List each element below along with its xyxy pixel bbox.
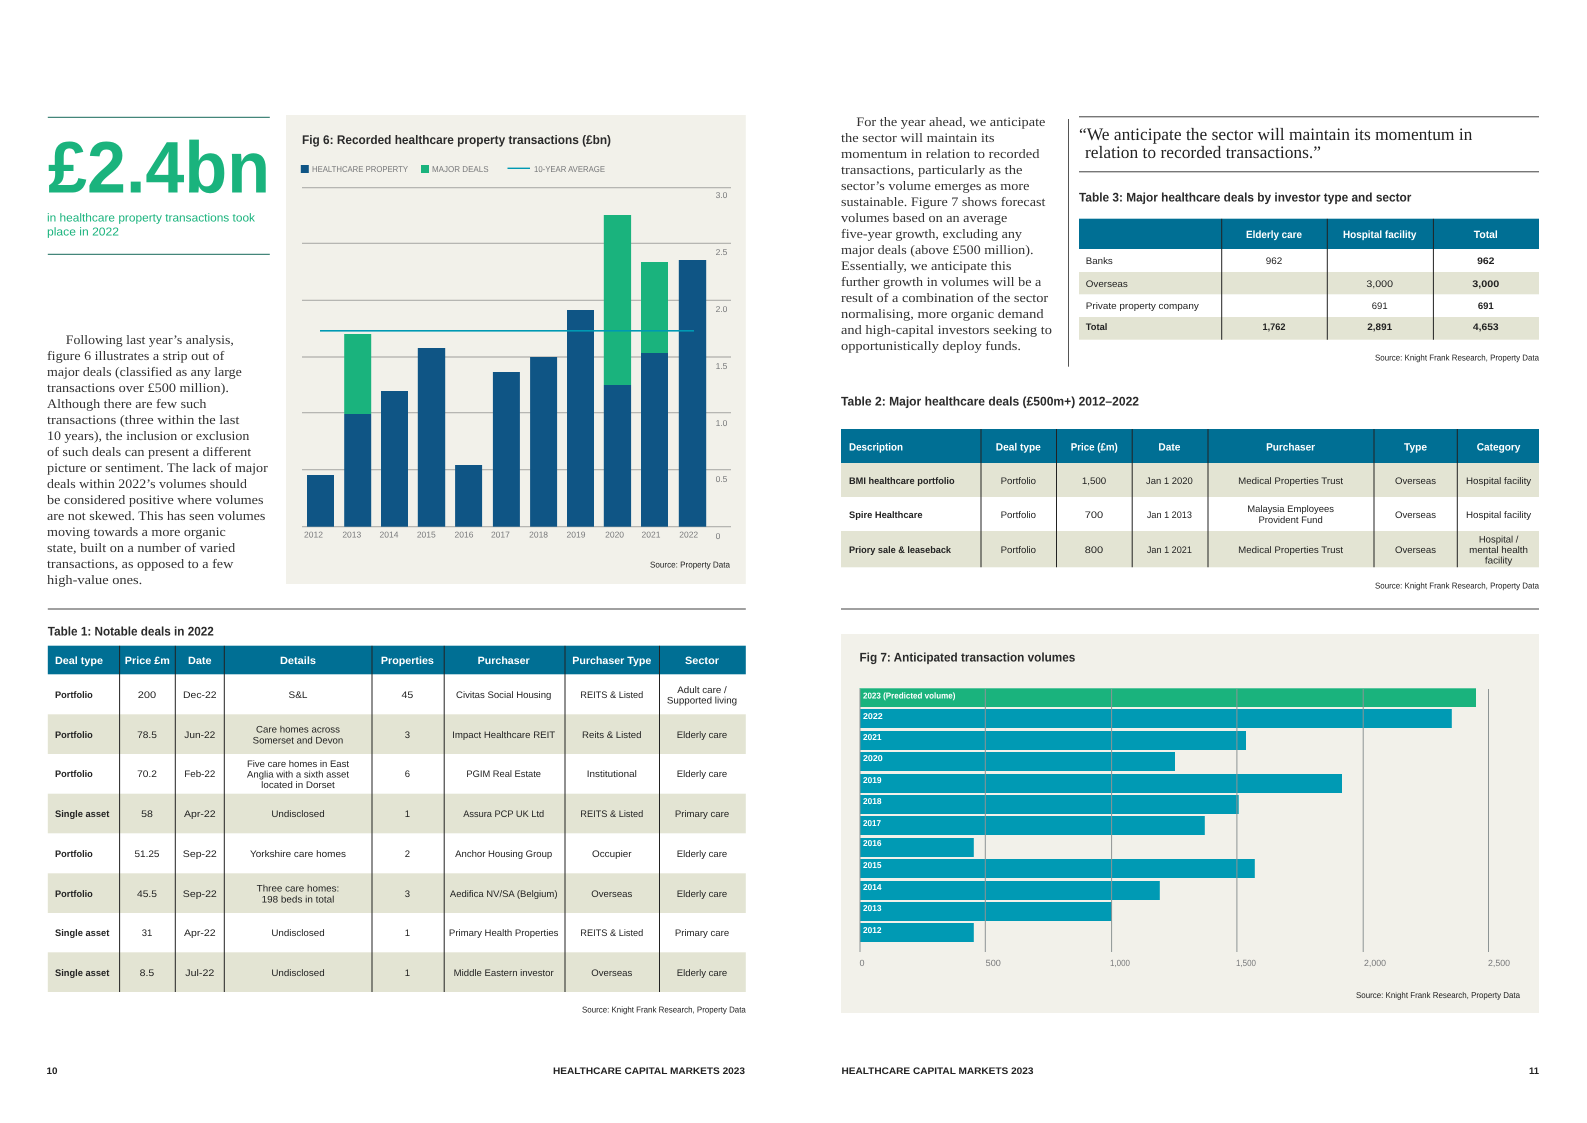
source note: Table 2: Source: Knight Frank Research, Property Data — [1375, 580, 1539, 590]
row: Overseas: Overseas — [1086, 279, 1128, 290]
row: Single asset 8.5: Single asset — [55, 968, 110, 979]
bar labels: 2022 — [863, 711, 883, 721]
callout: £2.4bn headline stat — [47, 117, 270, 255]
text block: right page body copy: opportunistically deploy funds. — [841, 338, 1021, 353]
bar labels: 2021 — [863, 732, 882, 742]
text block: right page body copy: and high-capital investors seeking to — [841, 322, 1052, 337]
source note: Source: Property Data — [650, 560, 730, 570]
row: Total — [1086, 322, 1499, 333]
x axis labels: 2019 — [567, 530, 586, 540]
row: Portfolio 51.25: Yorkshire care homes — [250, 849, 346, 860]
text block: right page body copy: momentum in relation to recorded — [841, 146, 1040, 161]
row: Portfolio 51.25 — [55, 849, 727, 860]
row: Single asset 31: Primary Health Properties — [449, 928, 559, 939]
table: major healthcare deals — [841, 429, 1539, 567]
table title: Table 3: Table 3: Major healthcare deals by investor type and sector — [1079, 191, 1412, 205]
row: Portfolio 78.5: Portfolio — [55, 730, 93, 741]
row: Portfolio 200: 200 — [138, 690, 156, 701]
table header row: Hospital facility — [1343, 229, 1417, 241]
x axis labels: 2021 — [642, 530, 661, 540]
text block: right page body copy: transactions, particularly as the — [841, 162, 1023, 177]
table header row — [55, 655, 719, 667]
row: BMI healthcare portfolio: Portfolio — [1001, 476, 1036, 487]
row: Priory sale & leaseback: Hospital / — [1479, 534, 1519, 545]
row: Portfolio 70.2: Feb-22 — [184, 769, 215, 780]
row: Banks: 962 — [1266, 256, 1282, 267]
row: Single asset 8.5: Jul-22 — [185, 968, 214, 979]
row: Portfolio 200: Dec-22 — [183, 690, 217, 701]
table header row — [1246, 229, 1498, 241]
pull quote: relation to recorded transactions.” — [1085, 142, 1321, 162]
x axis labels: 2022 — [679, 530, 698, 540]
y axis labels: 0.5 — [716, 474, 728, 484]
bar labels: 2015 — [863, 860, 882, 870]
row: Single asset 58: Undisclosed — [271, 809, 325, 820]
row: Spire Healthcare: Spire Healthcare — [849, 510, 922, 521]
x axis labels: 2,000 — [1364, 958, 1386, 968]
table header row: Category — [1477, 441, 1521, 453]
row: Portfolio 45.5: Portfolio — [55, 889, 93, 900]
x axis labels — [860, 958, 1510, 968]
row: Single asset 8.5: Middle Eastern investor — [454, 968, 554, 979]
row: Portfolio 78.5: Care homes across — [256, 724, 340, 735]
row: BMI healthcare portfolio: Medical Properties Trust — [1238, 476, 1343, 487]
y axis labels: 0 — [716, 531, 721, 541]
x axis labels: 2013 — [342, 530, 362, 540]
row: Portfolio 70.2: PGIM Real Estate — [466, 769, 541, 780]
text block: left page body copy: transactions over £500 million). — [47, 380, 229, 395]
row: Single asset 8.5: Elderly care — [677, 968, 727, 979]
row: Total: 4,653 — [1473, 322, 1499, 333]
row: BMI healthcare portfolio: BMI healthcare portfolio — [849, 476, 955, 487]
row: Priory sale & leaseback: Priory sale & leaseback — [849, 545, 952, 556]
table header row: Deal type — [55, 655, 103, 667]
stat caption: in healthcare property transactions took — [47, 213, 255, 225]
text block: left page body copy: transactions (three within the last — [47, 412, 240, 427]
legend: MAJOR DEALS — [432, 164, 489, 174]
row: Priory sale & leaseback — [849, 534, 1528, 566]
bar labels: 2014 — [863, 882, 882, 892]
bar labels: 2020 — [863, 753, 883, 763]
row: Portfolio 78.5: Somerset and Devon — [253, 735, 343, 746]
row: Portfolio 78.5: 3 — [405, 730, 410, 741]
footer: page 11 number: 11 — [1529, 1066, 1540, 1077]
chart title: Fig 6: Recorded healthcare property transactions (£bn) — [302, 133, 611, 147]
text block: right page body copy: Essentially, we anticipate this — [841, 258, 1012, 273]
table header row: Purchaser Type — [572, 655, 651, 667]
x axis labels: 2012 — [304, 530, 323, 540]
bar labels — [863, 690, 956, 935]
row: Portfolio 78.5: Reits & Listed — [582, 730, 642, 741]
row: Single asset 31: 31 — [142, 928, 152, 939]
row: Single asset 8.5: 8.5 — [140, 968, 154, 979]
row: Single asset 31: Single asset — [55, 928, 110, 939]
text block: left page body copy: deals within 2022’s volumes should — [47, 476, 248, 491]
10-year average line — [320, 330, 694, 332]
row: Banks: 962 — [1477, 256, 1495, 267]
row: Portfolio 78.5: 78.5 — [137, 730, 157, 741]
row: Spire Healthcare: Portfolio — [1001, 510, 1036, 521]
legend — [301, 164, 605, 174]
row: Portfolio 51.25: Portfolio — [55, 849, 93, 860]
row: Portfolio 200: 45 — [402, 690, 413, 701]
row: BMI healthcare portfolio: Jan 1 2020 — [1146, 476, 1193, 487]
table title: Table 1: Table 1: Notable deals in 2022 — [48, 624, 214, 638]
row: Single asset 31: Apr-22 — [184, 928, 216, 939]
table header row: Properties — [381, 655, 434, 667]
row: Single asset 31 — [55, 928, 729, 939]
footer: page 11 publication name: HEALTHCARE CAPITAL MARKETS 2023 — [842, 1066, 1034, 1077]
table: deals by investor type and sector — [1079, 219, 1539, 340]
row: Spire Healthcare: Malaysia Employees — [1247, 504, 1334, 515]
row: Portfolio 70.2: Portfolio — [55, 769, 93, 780]
bar labels: 2012 — [863, 925, 882, 935]
y axis labels: 2.0 — [716, 304, 728, 314]
bar labels: 2016 — [863, 838, 882, 848]
row: Priory sale & leaseback: Overseas — [1395, 545, 1436, 556]
row: Private property company: Private property company — [1086, 301, 1199, 312]
x axis labels: 2018 — [529, 530, 548, 540]
y axis labels: 2.5 — [716, 247, 728, 257]
table header row: Purchaser — [478, 655, 530, 667]
table header row: Sector — [685, 655, 719, 667]
table header row: Elderly care — [1246, 229, 1302, 241]
row: Single asset 31: Undisclosed — [271, 928, 325, 939]
row: Portfolio 51.25: Sep-22 — [183, 849, 217, 860]
row: Single asset 8.5: 1 — [405, 968, 410, 979]
row: Single asset 58: Single asset — [55, 809, 110, 820]
row: Portfolio 200: Supported living — [667, 695, 737, 706]
row: Portfolio 78.5: Jun-22 — [184, 730, 215, 741]
text block: right page body copy: result of a combination of the sector — [841, 290, 1049, 305]
row: Portfolio 78.5: Elderly care — [677, 730, 727, 741]
row: Single asset 58: 58 — [141, 809, 153, 820]
legend: 10-YEAR AVERAGE — [534, 164, 605, 174]
x axis labels: 500 — [986, 958, 1001, 968]
bar labels: 2023 (Predicted volume) — [863, 690, 956, 700]
row: Single asset 31: REITS & Listed — [580, 928, 643, 939]
table header row: Price (£m) — [1071, 441, 1118, 453]
x axis labels: 2014 — [380, 530, 399, 540]
bar labels: 2018 — [863, 796, 882, 806]
text block: left page body copy — [47, 332, 269, 587]
text block: left page body copy: state, built on a number of varied — [47, 540, 236, 555]
text block: left page body copy: major deals (classified as any large — [47, 364, 242, 379]
row: BMI healthcare portfolio: 1,500 — [1082, 476, 1106, 487]
source note: Source: Knight Frank Research, Property Data — [1356, 990, 1520, 1000]
row: Banks — [1086, 256, 1495, 267]
row: Portfolio 70.2: Institutional — [587, 769, 637, 780]
text block: right page body copy: volumes based on an average — [841, 210, 1008, 225]
row: Portfolio 45.5: 3 — [405, 889, 410, 900]
row: Portfolio 200 — [55, 685, 737, 706]
x axis labels: 2020 — [605, 530, 624, 540]
text block: left page body copy: high-value ones. — [47, 572, 142, 587]
row: Portfolio 70.2: Five care homes in East — [247, 759, 349, 770]
stat caption — [47, 213, 255, 239]
row: Portfolio 45.5: 45.5 — [137, 889, 157, 900]
source note: Table 1: Source: Knight Frank Research, Property Data — [582, 1004, 746, 1014]
chart title: Fig 7: Anticipated transaction volumes — [860, 651, 1075, 665]
text block: right page body copy: normalising, more organic demand — [841, 306, 1044, 321]
row: Portfolio 78.5: Impact Healthcare REIT — [452, 730, 555, 741]
table header row — [849, 441, 1521, 453]
text block: right page body copy: sustainable. Figure 7 shows forecast — [841, 194, 1046, 209]
text block: left page body copy: figure 6 illustrates a strip out of — [47, 348, 225, 363]
row: Priory sale & leaseback: Jan 1 2021 — [1147, 545, 1192, 556]
row: Portfolio 51.25: 51.25 — [134, 849, 160, 860]
row: Portfolio 51.25: Elderly care — [677, 849, 727, 860]
row: Portfolio 70.2 — [55, 759, 727, 791]
bar labels: 2013 — [863, 903, 882, 913]
table header row: Description — [849, 441, 903, 453]
panel: Fig 6 chart — [286, 115, 746, 584]
table: notable deals in 2022 — [48, 646, 746, 992]
row: Single asset 58: 1 — [405, 809, 410, 820]
bar labels: 2017 — [863, 818, 881, 828]
row: Spire Healthcare — [849, 504, 1531, 526]
stacked bar chart — [307, 215, 706, 527]
text block: right page body copy: five-year growth, excluding any — [841, 226, 1023, 241]
row: Portfolio 70.2: 6 — [405, 769, 410, 780]
row: Portfolio 45.5: Elderly care — [677, 889, 727, 900]
table header row: Date — [1158, 441, 1181, 453]
row: Private property company: 691 — [1478, 301, 1494, 312]
text block: right page body copy: further growth in volumes will be a — [841, 274, 1042, 289]
x axis labels — [304, 530, 698, 540]
text block: left page body copy: picture or sentiment. The lack of major — [47, 460, 269, 475]
row: Overseas: 3,000 — [1472, 279, 1499, 290]
row: Portfolio 70.2: 70.2 — [137, 769, 157, 780]
footer: page 10 publication name: HEALTHCARE CAPITAL MARKETS 2023 — [553, 1066, 745, 1077]
pull quote — [1079, 116, 1539, 172]
table header row: Date — [188, 655, 212, 667]
row: Single asset 58: REITS & Listed — [580, 809, 643, 820]
row: Single asset 31: Primary care — [675, 928, 729, 939]
stat figure: £2.4bn — [48, 128, 270, 208]
row: Portfolio 51.25: Occupier — [592, 849, 632, 860]
row: Single asset 58: Primary care — [675, 809, 729, 820]
table header row: Purchaser — [1266, 441, 1315, 453]
row: Portfolio 70.2: Anglia with a sixth asset — [247, 769, 349, 780]
row: BMI healthcare portfolio — [849, 476, 1531, 487]
pull quote: “We anticipate the sector will maintain its momentum in — [1079, 124, 1473, 144]
row: Priory sale & leaseback: mental health — [1469, 545, 1528, 556]
row: Portfolio 200: Civitas Social Housing — [456, 690, 551, 701]
row: Banks: Banks — [1086, 256, 1113, 267]
row: Single asset 58 — [55, 809, 729, 820]
row: Total: 1,762 — [1262, 322, 1286, 333]
text block: left page body copy: moving towards a more organic — [47, 524, 226, 539]
horizontal bar chart — [860, 688, 1488, 952]
row: Single asset 58: Apr-22 — [184, 809, 216, 820]
row: Single asset 31: 1 — [405, 928, 410, 939]
row: Total: 2,891 — [1367, 322, 1393, 333]
row: Priory sale & leaseback: Medical Properties Trust — [1238, 545, 1343, 556]
row: Portfolio 45.5: Aedifica NV/SA (Belgium) — [450, 889, 558, 900]
row: Portfolio 200: S&L — [289, 690, 307, 701]
row: Portfolio 45.5: Three care homes: — [257, 883, 339, 894]
row: BMI healthcare portfolio: Hospital facility — [1466, 476, 1531, 487]
row: Spire Healthcare: Overseas — [1395, 510, 1436, 521]
text block: left page body copy: are not skewed. This has seen volumes — [47, 508, 265, 523]
x axis labels: 2017 — [491, 530, 510, 540]
row: Priory sale & leaseback: 800 — [1085, 545, 1103, 556]
row: Portfolio 70.2: Elderly care — [677, 769, 727, 780]
text block: right page body copy — [841, 114, 1052, 353]
table title: Table 2: Table 2: Major healthcare deals (£500m+) 2012–2022 — [841, 395, 1139, 409]
text block: left page body copy: of such deals can present a different — [47, 444, 252, 459]
text block: left page body copy: be considered positive where volumes — [47, 492, 264, 507]
x axis labels: 0 — [860, 958, 865, 968]
text block: right page body copy: sector’s volume emerges as more — [841, 178, 1030, 193]
row: Spire Healthcare: Hospital facility — [1466, 510, 1531, 521]
row: Single asset 8.5: Undisclosed — [271, 968, 325, 979]
table header row: Total — [1474, 229, 1498, 241]
row: Single asset 58: Assura PCP UK Ltd — [463, 809, 544, 820]
row: Portfolio 70.2: located in Dorset — [261, 780, 335, 791]
row: Total: Total — [1086, 322, 1107, 333]
legend: HEALTHCARE PROPERTY — [312, 164, 408, 174]
row: Portfolio 45.5 — [55, 883, 727, 905]
row: Priory sale & leaseback: facility — [1485, 555, 1513, 566]
row: Portfolio 45.5: 198 beds in total — [262, 894, 334, 905]
x axis labels: 2015 — [417, 530, 436, 540]
row: Priory sale & leaseback: Portfolio — [1001, 545, 1036, 556]
row: Portfolio 200: Portfolio — [55, 690, 93, 701]
text block: left page body copy: 10 years), the inclusion or exclusion — [47, 428, 250, 443]
row: Portfolio 45.5: Sep-22 — [183, 889, 217, 900]
text block: left page body copy: transactions, as opposed to a few — [47, 556, 234, 571]
stat caption: place in 2022 — [47, 227, 119, 239]
text block: left page body copy: Although there are few such — [47, 396, 207, 411]
row: Portfolio 51.25: Anchor Housing Group — [455, 849, 552, 860]
y axis labels — [716, 190, 728, 541]
table header row: Type — [1404, 441, 1427, 453]
text block: left page body copy: Following last year’s analysis, — [66, 332, 234, 347]
row: Spire Healthcare: Provident Fund — [1258, 515, 1323, 526]
table header row: Details — [280, 655, 316, 667]
row: Portfolio 78.5 — [55, 724, 727, 746]
row: Portfolio 200: REITS & Listed — [580, 690, 643, 701]
x axis labels: 2016 — [455, 530, 474, 540]
row: Portfolio 45.5: Overseas — [591, 889, 633, 900]
row: Single asset 8.5: Overseas — [591, 968, 633, 979]
panel: Fig 7 chart — [841, 634, 1539, 1013]
x axis labels: 2,500 — [1488, 958, 1510, 968]
row: Portfolio 51.25: 2 — [405, 849, 410, 860]
bar labels: 2019 — [863, 775, 882, 785]
y axis labels: 1.5 — [716, 361, 728, 371]
row: Private property company — [1086, 301, 1494, 312]
row: Single asset 8.5 — [55, 968, 727, 979]
row: Overseas — [1086, 279, 1499, 290]
text block: right page body copy: the sector will maintain its — [841, 130, 994, 145]
table header row: Price £m — [125, 655, 170, 667]
y axis labels: 1.0 — [716, 418, 728, 428]
y axis labels: 3.0 — [716, 190, 728, 200]
table header row: Deal type — [996, 441, 1041, 453]
row: Portfolio 200: Adult care / — [677, 685, 727, 696]
footer: page 10 number: 10 — [46, 1066, 58, 1077]
text block: right page body copy: major deals (above £500 million). — [841, 242, 1034, 257]
row: Spire Healthcare: 700 — [1085, 510, 1103, 521]
x axis labels: 1,000 — [1110, 958, 1130, 968]
source note: Table 3: Source: Knight Frank Research, Property Data — [1375, 352, 1539, 362]
row: BMI healthcare portfolio: Overseas — [1395, 476, 1436, 487]
x axis labels: 1,500 — [1236, 958, 1256, 968]
text block: right page body copy: For the year ahead, we anticipate — [856, 114, 1046, 129]
row: Private property company: 691 — [1372, 301, 1388, 312]
row: Spire Healthcare: Jan 1 2013 — [1147, 510, 1192, 521]
row: Overseas: 3,000 — [1366, 279, 1393, 290]
